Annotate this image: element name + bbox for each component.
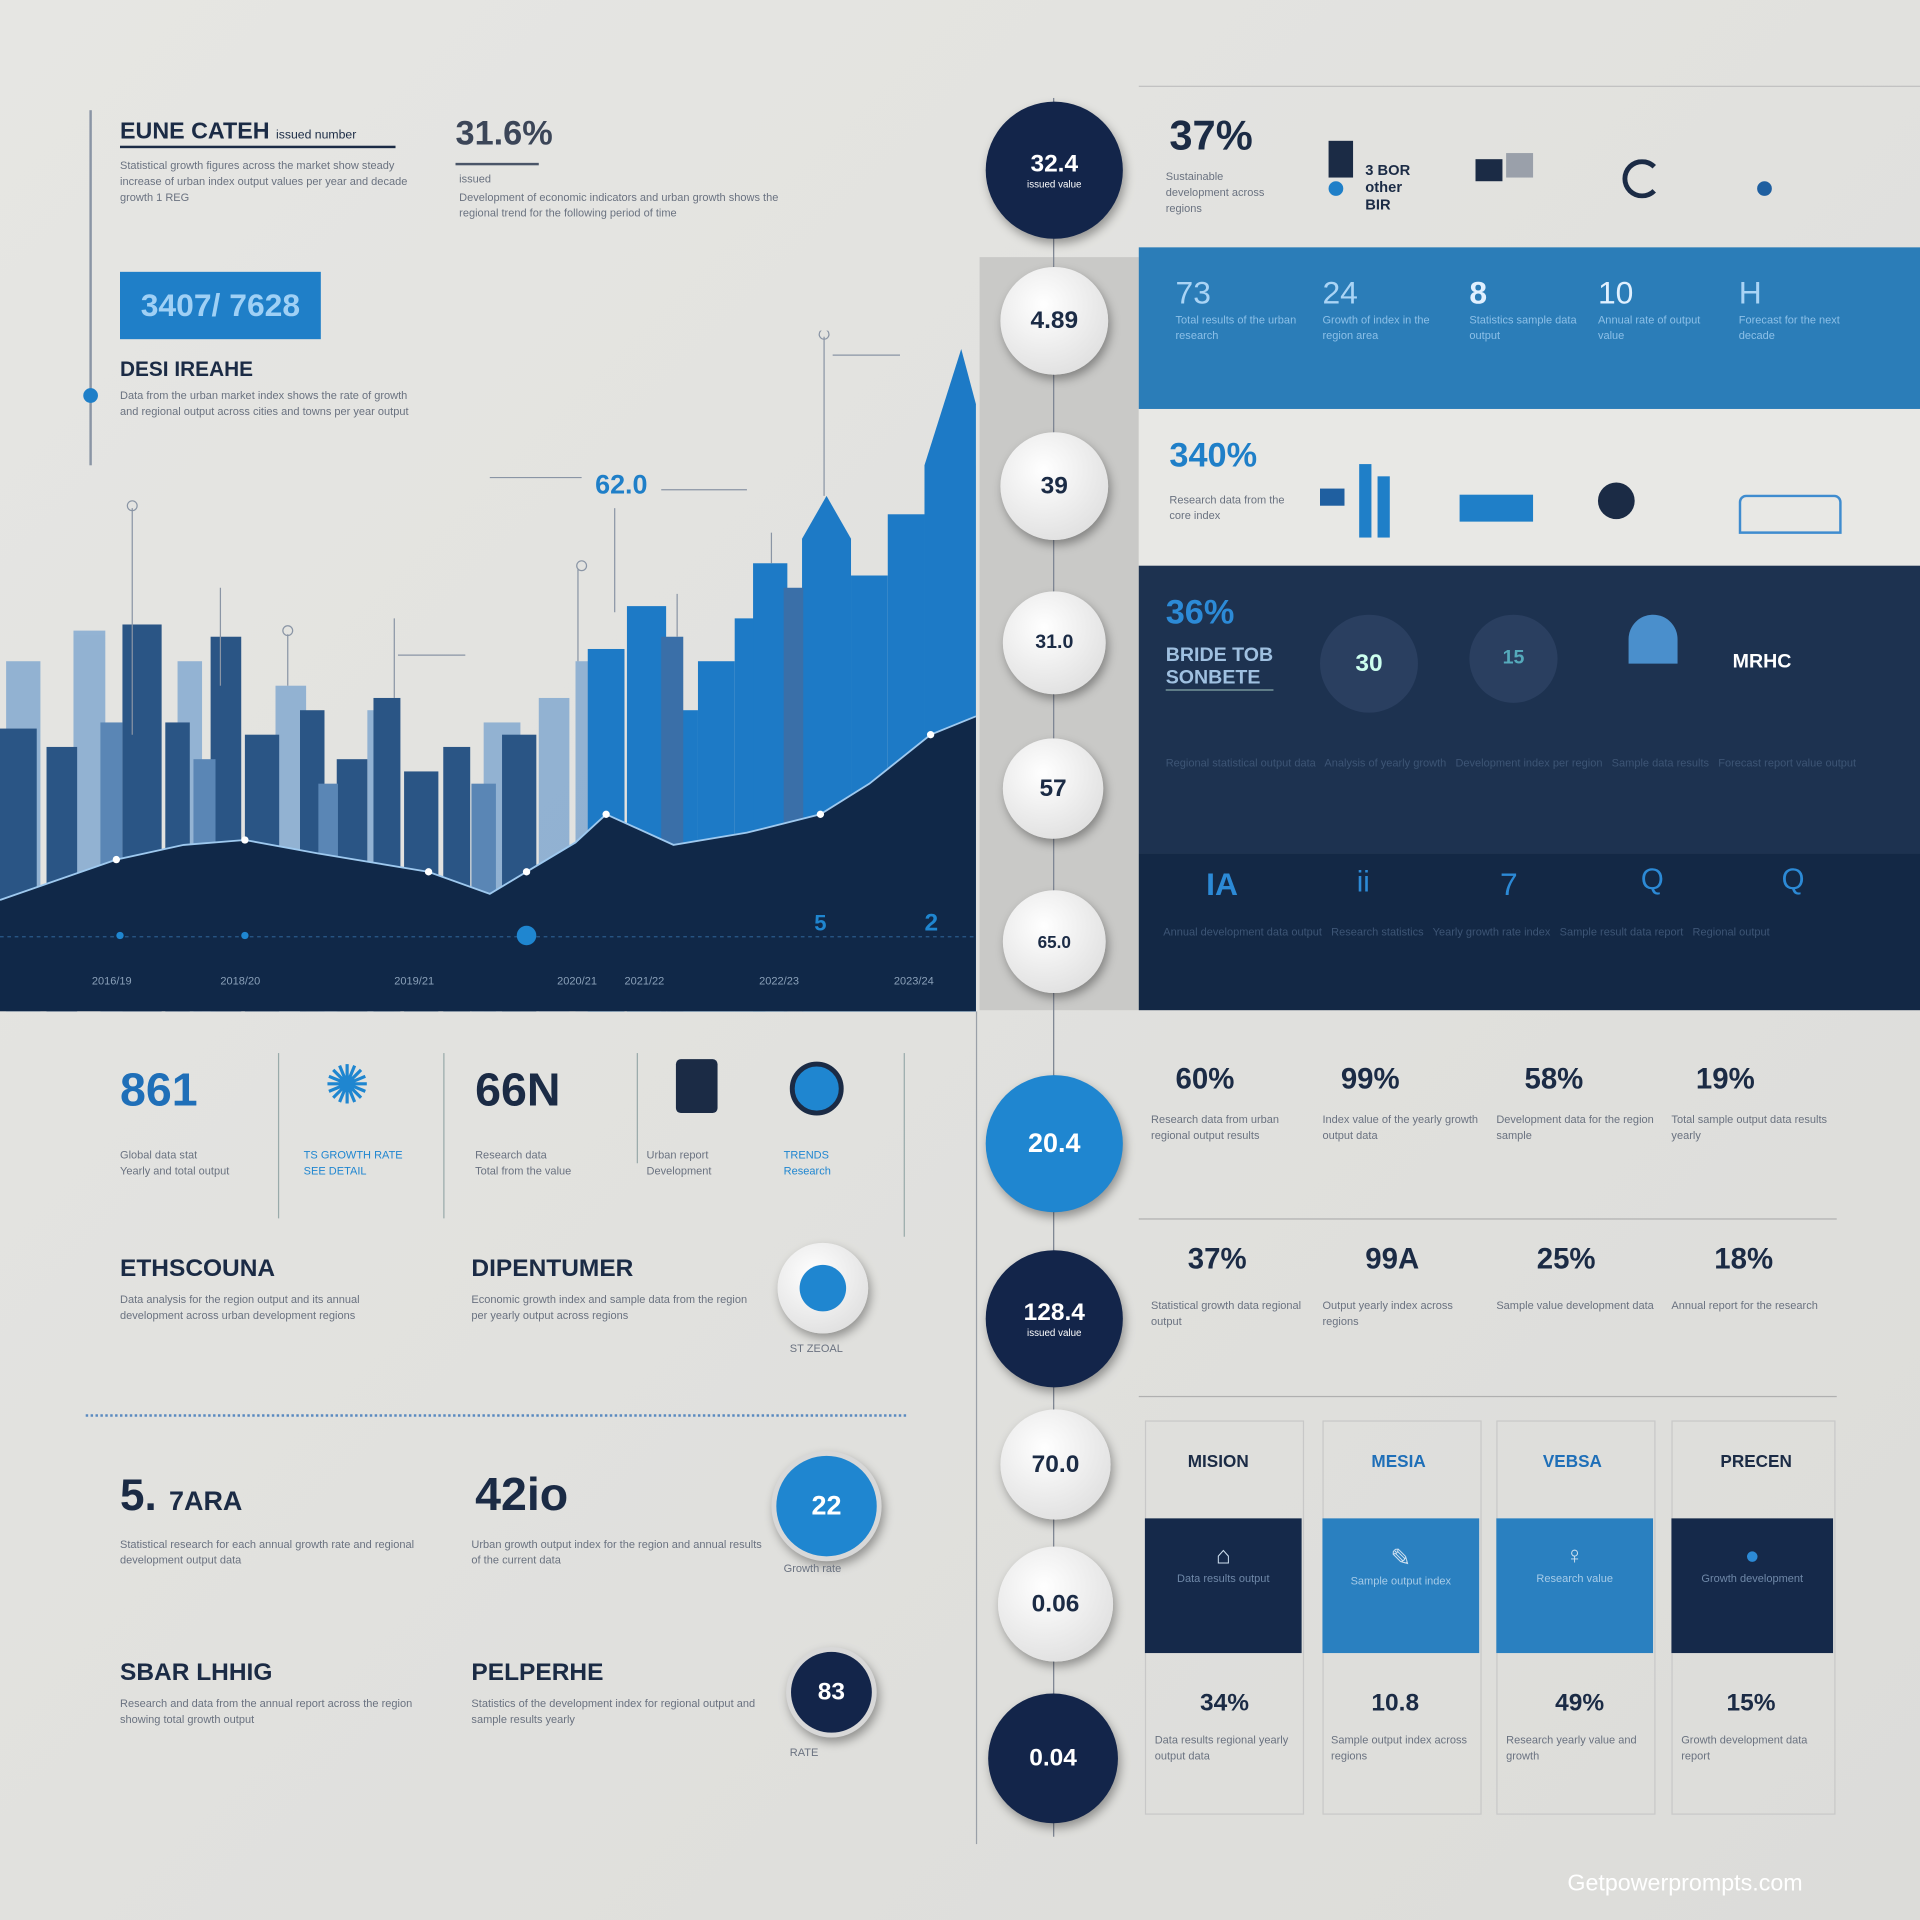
- panel: bottom-left stats: Data analysis for the region output and its annual development across urban development regions: [120, 1293, 360, 1321]
- panel: dark navy section: MRHC: [1733, 651, 1791, 672]
- panel: dark navy section: [1139, 566, 1920, 853]
- panel: dark navy section: Regional statistical output data Analysis of yearly growth Development index per region Sample data results Forecast report value output: [1166, 757, 1856, 769]
- cards: Research value: [1536, 1572, 1613, 1584]
- timeline circles: 65.0: [1038, 932, 1071, 951]
- timeline circles: 128.4: [1024, 1299, 1085, 1326]
- panel: blue stats band: [1139, 247, 1920, 409]
- panel: bottom-left stats: ST ZEOAL: [790, 1342, 843, 1354]
- text block: Statistical growth figures across the market show steady increase of urban index output values per year and decade growth 1 REG: [120, 159, 407, 203]
- cards: 34%: [1200, 1690, 1249, 1717]
- panel: top-right row 1: BIR: [1365, 196, 1391, 213]
- panel: top-right row 1: [1139, 86, 1920, 247]
- panel: bottom-left stats: Statistics of the development index for regional output and sample results yearly: [471, 1697, 755, 1725]
- panel: bottom-left stats: TS GROWTH RATE: [304, 1149, 403, 1161]
- panel: dark navy section: 30: [1355, 650, 1383, 677]
- panel: bottom-right stat grid: Research data from urban regional output results: [1151, 1113, 1279, 1141]
- panel: darker navy bottom row: 7: [1500, 866, 1518, 902]
- panel: darker navy bottom row: Annual development data output Research statistics Yearly growth rate index Sample result data report Regional output: [1163, 926, 1770, 938]
- stat heading: 31.6%: [456, 114, 553, 152]
- panel: blue stats band: 10: [1598, 274, 1633, 311]
- panel: dark navy section: 15: [1503, 648, 1524, 669]
- panel: bottom-left stats: SBAR LHHIG: [120, 1659, 272, 1686]
- chart: city skyline growth: [0, 331, 980, 1011]
- panel: bottom-right stat grid: Output yearly index across regions: [1322, 1299, 1453, 1327]
- chart: city skyline growth: 2016/19: [92, 975, 132, 987]
- panel: bottom-left stats: ✺: [324, 1056, 370, 1116]
- panel: bottom-left stats: Total from the value: [475, 1164, 571, 1177]
- panel: bottom-right stat grid: 19%: [1696, 1063, 1755, 1096]
- panel: bottom-left stats: Growth rate: [784, 1562, 841, 1575]
- panel: bottom-left stats: Development: [647, 1164, 711, 1177]
- panel: bottom-right stat grid: Total sample output data results yearly: [1671, 1113, 1827, 1141]
- panel: top-left intro text: issued: [459, 173, 491, 185]
- cards: ✎: [1391, 1545, 1411, 1572]
- cards: MISION: [1188, 1451, 1249, 1471]
- icons: [1329, 141, 1353, 178]
- panel: bottom-right stat grid: 99%: [1341, 1063, 1400, 1096]
- panel: darker navy bottom row: Q: [1782, 863, 1804, 896]
- panel: dark navy section: BRIDE TOB SONBETE: [1166, 645, 1273, 688]
- panel: blue stats band: Total results of the urban research: [1176, 313, 1296, 342]
- chart: city skyline growth: 5: [814, 911, 827, 936]
- panel: top-left intro text: [86, 104, 894, 471]
- cards: [1145, 1420, 1837, 1812]
- panel: bottom-right stat grid: Statistical growth data regional output: [1151, 1299, 1301, 1327]
- panel: bottom-left stats: TRENDS: [784, 1149, 829, 1161]
- chart: city skyline growth: 2022/23: [759, 975, 799, 987]
- panel: blue stats band: 73: [1176, 274, 1211, 311]
- panel: top-left intro text: Data from the urban market index shows the rate of growth and regional output across cities and towns per year output: [120, 389, 409, 418]
- panel: bottom-left stats: RATE: [790, 1746, 818, 1758]
- panel: top-right row 1: 3 BOR: [1365, 162, 1410, 179]
- panel: bottom-right stat grid: Sample value development data: [1496, 1299, 1654, 1311]
- panel: top-right row 1: Sustainable development across regions: [1166, 170, 1264, 214]
- cards: 10.8: [1371, 1690, 1419, 1717]
- cards: VEBSA: [1543, 1451, 1602, 1471]
- panel: blue stats band: 24: [1322, 274, 1358, 311]
- panel: light row with icons: [1139, 409, 1920, 566]
- panel: bottom-left stats: Research: [784, 1164, 831, 1177]
- panel: bottom-left stats: 5. 7ARA: [120, 1469, 242, 1520]
- chart: city skyline growth: 2: [924, 910, 938, 937]
- chart: city skyline growth: 2019/21: [394, 975, 434, 987]
- cards: ⌂: [1216, 1543, 1231, 1570]
- panel: bottom-left stats: 22: [812, 1490, 842, 1521]
- timeline circles: 31.0: [1035, 632, 1073, 653]
- cards: Data results regional yearly output data: [1155, 1734, 1288, 1762]
- panel: top-right row 1: 37%: [1169, 113, 1253, 159]
- cards: Growth development data report: [1681, 1734, 1807, 1762]
- cards: ♀: [1566, 1543, 1584, 1570]
- cards: Data results output: [1177, 1572, 1270, 1584]
- subheading: DESI IREAHE: [120, 358, 253, 381]
- timeline circles: 39: [1041, 472, 1068, 499]
- panel: bottom-right stat grid: [1139, 1053, 1843, 1812]
- panel: top-right row 1: other: [1365, 179, 1402, 196]
- panel: bottom-right stat grid: 58%: [1524, 1063, 1583, 1096]
- panel: blue stats band: Annual rate of output value: [1598, 313, 1700, 342]
- panel: bottom-right stat grid: Index value of the yearly growth output data: [1322, 1113, 1478, 1141]
- timeline circles: issued value: [1027, 179, 1082, 190]
- panel: bottom-left stats: Global data stat: [120, 1149, 197, 1161]
- panel: bottom-left stats: ETHSCOUNA: [120, 1255, 275, 1282]
- panel: light row with icons: Research data from the core index: [1169, 493, 1285, 522]
- timeline circles: 32.4: [1030, 151, 1078, 178]
- panel: blue stats band: 8: [1469, 274, 1487, 311]
- cards: ●: [1745, 1543, 1760, 1570]
- panel: bottom-left stats: Urban report: [647, 1149, 708, 1161]
- cards: Growth development: [1701, 1572, 1803, 1584]
- panel: darker navy bottom row: [1139, 853, 1920, 1010]
- timeline circles: 20.4: [1028, 1128, 1080, 1158]
- watermark: Getpowerprompts.com: [1567, 1871, 1803, 1897]
- chart: city skyline growth: 62.0: [595, 469, 648, 499]
- panel: darker navy bottom row: Q: [1641, 863, 1664, 896]
- panel: bottom-left stats: SEE DETAIL: [304, 1164, 367, 1177]
- panel: bottom-left stats: [86, 1047, 931, 1794]
- highlight box: 3407/ 7628: [141, 287, 300, 323]
- panel: bottom-left stats: 861: [120, 1065, 198, 1117]
- cards: Sample output index: [1351, 1575, 1451, 1587]
- timeline column background: [980, 257, 1139, 1010]
- cards: MESIA: [1371, 1451, 1426, 1471]
- panel: dark navy section: 36%: [1166, 593, 1234, 631]
- panel: bottom-left stats: Statistical research for each annual growth rate and regional development output data: [120, 1538, 414, 1566]
- panel: bottom-left stats: Research data: [475, 1149, 547, 1161]
- panel: light row with icons: 340%: [1169, 436, 1257, 474]
- timeline circles: issued value: [1027, 1327, 1082, 1338]
- panel: bottom-left stats: Research and data from the annual report across the region showing total growth output: [120, 1697, 412, 1725]
- panel: darker navy bottom row: ii: [1357, 866, 1370, 899]
- panel: bottom-left stats: PELPERHE: [471, 1659, 603, 1686]
- timeline circles: 57: [1039, 774, 1067, 801]
- panel: bottom-right stat grid: 25%: [1537, 1243, 1596, 1276]
- panel: bottom-left stats: Economic growth index and sample data from the region per yearly output across regions: [471, 1293, 747, 1321]
- highlight box: [120, 272, 321, 339]
- panel: top-left intro text: Development of economic indicators and urban growth shows the regional trend for the following period of time: [459, 191, 778, 219]
- panel: blue stats band: Statistics sample data output: [1469, 313, 1577, 342]
- timeline circles: 70.0: [1032, 1450, 1079, 1477]
- chart: city skyline growth: 2020/21: [557, 975, 597, 987]
- chart: city skyline growth: 2021/22: [624, 975, 664, 987]
- chart: city skyline growth: 2018/20: [220, 975, 260, 987]
- panel: blue stats band: H: [1739, 274, 1762, 311]
- panel: darker navy bottom row: IA: [1206, 866, 1238, 902]
- panel: bottom-right stat grid: 99A: [1365, 1243, 1419, 1276]
- panel: bottom-right stat grid: 37%: [1188, 1243, 1247, 1276]
- panel: bottom-left stats: 66N: [475, 1065, 560, 1117]
- panel: bottom-right stat grid: 18%: [1714, 1243, 1773, 1276]
- panel: bottom-right stat grid: Development data for the region sample: [1496, 1113, 1654, 1141]
- cards: 15%: [1727, 1690, 1776, 1717]
- timeline circles: [986, 102, 1127, 1828]
- panel: bottom-right stat grid: Annual report for the research: [1671, 1299, 1818, 1311]
- panel: bottom-left stats: 42io: [475, 1469, 568, 1521]
- heading: EUNE CATEH issued number: [120, 119, 356, 144]
- panel: bottom-left stats: Urban growth output index for the region and annual results of the current data: [471, 1538, 762, 1566]
- panel: blue stats band: Growth of index in the region area: [1322, 313, 1430, 342]
- panel: bottom-left stats: DIPENTUMER: [471, 1255, 633, 1282]
- cards: PRECEN: [1720, 1451, 1792, 1471]
- timeline circles: 0.04: [1029, 1744, 1077, 1771]
- cards: 49%: [1555, 1690, 1604, 1717]
- panel: bottom-right stat grid: 60%: [1176, 1063, 1234, 1096]
- timeline circles: 4.89: [1030, 307, 1078, 334]
- cards: Research yearly value and growth: [1506, 1734, 1637, 1762]
- panel: bottom-left stats: Yearly and total output: [120, 1164, 229, 1177]
- timeline circles: 0.06: [1032, 1590, 1079, 1617]
- panel: bottom-left stats: 83: [818, 1678, 845, 1705]
- chart: city skyline growth: 2023/24: [894, 975, 934, 987]
- cards: Sample output index across regions: [1331, 1734, 1467, 1762]
- panel: blue stats band: Forecast for the next decade: [1739, 313, 1840, 342]
